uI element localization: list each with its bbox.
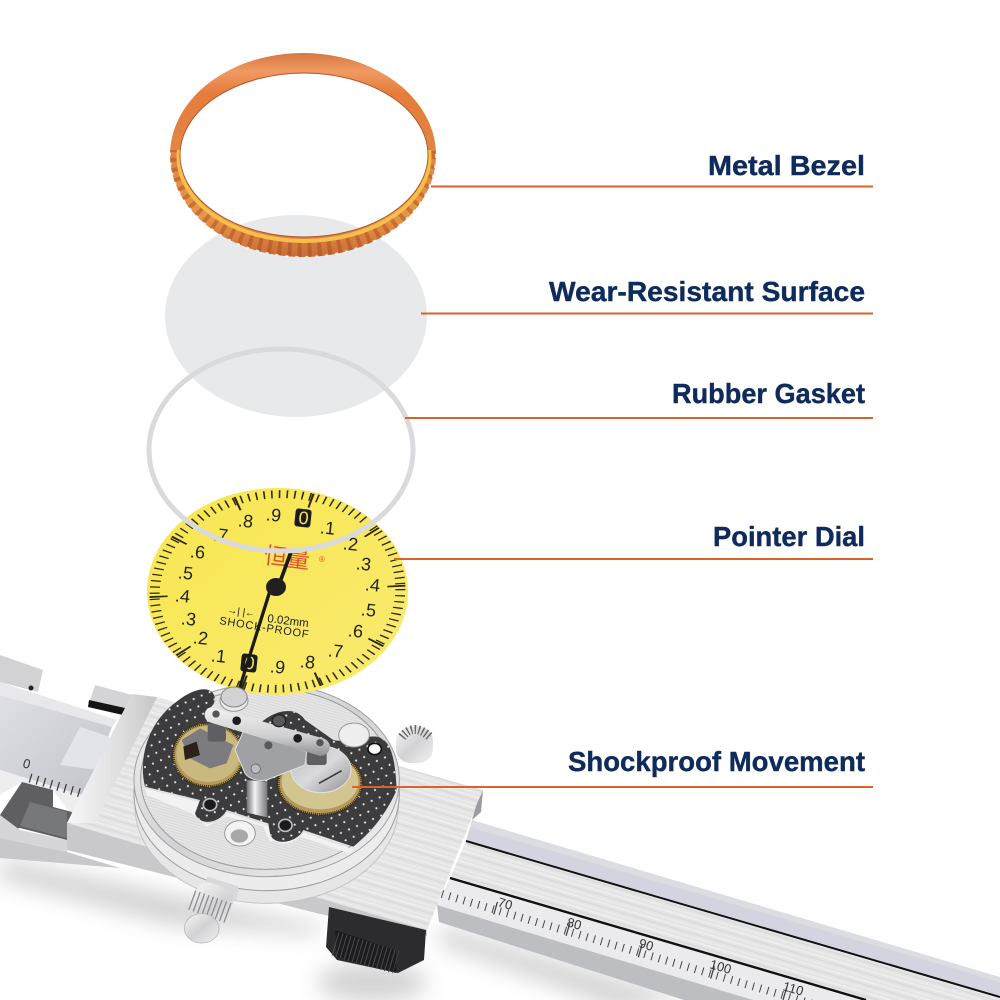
lower black groove [450,878,866,1000]
beam scale strip [437,878,866,1000]
major scale ticks [495,908,870,1000]
rib lines [335,944,396,962]
silver well upper left [220,690,248,711]
dial numbers: .9 [269,656,286,678]
center post [247,780,267,817]
housing top rim [134,683,399,877]
bezel outer scallops [170,152,436,258]
hole center [279,819,292,831]
rear block [88,685,132,715]
dial housing [134,683,399,903]
right brass gear [278,746,362,815]
shadow under slider [0,858,320,935]
movement plate [143,689,397,853]
registered mark: ® [319,555,325,564]
minor scale ticks [442,894,870,1000]
leader line [352,786,873,788]
plate screw [251,764,260,773]
top zero: 0 [298,508,310,529]
dial numbers: .8 [299,651,316,673]
plate screw upper [264,741,272,749]
label text: Rubber Gasket [672,378,865,409]
silver well lower [225,821,255,846]
left brass gear [173,723,244,787]
housing floor [141,688,393,869]
bezel knurling [170,150,436,257]
cut-out recess [0,782,72,840]
needle [237,549,293,692]
dial minor ticks [148,486,407,697]
dial numbers: .1 [319,517,336,539]
beam lavender face [466,827,1000,997]
spring dark part [183,742,200,760]
black thumb button [326,907,426,973]
rear block dark slot [88,700,125,715]
knob end cap [184,914,219,943]
housing outer side [135,710,398,903]
dial numbers: .4 [174,585,191,607]
left lavender face [0,695,112,797]
dial numbers: .4 [364,574,381,596]
scale numbers [496,894,805,999]
cover slot screw [319,771,342,783]
gear face [282,755,358,809]
resolution arrows: →| |← [227,605,256,620]
post head [221,687,247,707]
label text: Shockproof Movement [568,746,865,777]
top zero box [294,508,312,528]
hole left [203,799,217,811]
left scale strip [0,770,85,815]
pinion [307,748,327,765]
hole upper [272,715,286,727]
bottom zero: 0 [244,653,256,674]
shadow under button [317,962,427,1000]
leader line [421,312,873,314]
shadow under beam [440,925,690,1000]
button ribs [335,930,396,973]
dial numbers: .6 [347,620,364,642]
rubber gasket ring [149,349,413,551]
dial face [147,488,408,695]
recess floor [20,802,67,838]
dial numbers: .1 [210,645,227,667]
bar body [205,708,330,756]
beam side face [437,905,753,1000]
brand logo: 恒量 [263,542,311,574]
leader line [431,186,873,188]
well screw lower [231,829,248,843]
housing seam [134,697,399,891]
dial numbers: .7 [327,640,344,662]
scale numbers: 110 [781,978,805,999]
knob knurl [192,900,231,914]
gear cover disc [291,746,351,793]
bottom knurled knob [182,877,239,943]
lower left bar [0,815,67,852]
plate perforated dots [143,689,397,847]
beam brushed center [450,841,1000,1000]
left beam section [0,655,132,868]
gear teeth [278,752,362,815]
window [60,727,110,770]
bar screw 2 [232,716,241,725]
jaw screw [28,686,34,690]
center triangular plate [235,730,307,780]
bezel knurling wrapper [170,150,436,258]
slider side [67,823,427,936]
dial numbers: .3 [180,608,197,630]
dial numbers: .3 [355,553,372,575]
dial numbers: .2 [192,627,209,649]
knob body [396,727,433,763]
gear teeth [173,723,244,787]
scale numbers: 70 [496,894,514,913]
plate shadow lip [145,788,353,853]
jaw block [0,655,43,692]
gear hub cover [182,728,233,768]
left scale ticks [30,778,84,794]
lower left fade [0,838,120,868]
beam top strip [470,820,1000,985]
left scale zero: 0 [21,755,32,772]
knob stem [203,877,239,900]
dial numbers: .9 [265,504,282,526]
metal bezel ring [170,53,436,257]
slider front bar [67,694,157,823]
bezel body [170,53,436,257]
slider body [67,694,483,936]
resolution text: 0.02mm [267,613,309,630]
label text: Metal Bezel [708,150,865,181]
dial numbers: .5 [360,599,377,621]
scale numbers: 100 [708,956,733,977]
bar screw 1 [212,710,220,718]
upper black groove [466,841,1000,997]
bottom zero box [240,653,258,673]
leader line [394,558,873,560]
bar screw 3 [293,734,302,743]
plate dark [143,689,397,847]
pinion [208,723,226,742]
needle hub [266,578,286,596]
slider right edge [472,790,483,820]
dial numbers: .5 [177,562,194,584]
left top strip [0,682,117,727]
caliper beam [437,820,1000,1000]
bezel inner edge [180,73,428,237]
knob knurl [402,730,430,737]
dial numbers: .7 [212,524,229,546]
dial numbers: .8 [237,510,254,532]
dial numbers: .2 [342,533,359,555]
label text: Wear-Resistant Surface [549,276,865,307]
top bridge bar [205,708,330,756]
ground shadows [0,858,690,1000]
gear face [176,726,240,782]
knob cylinder [182,879,237,942]
scale numbers: 80 [565,914,583,933]
shock-proof text: SHOCK-PROOF [219,615,310,641]
label text: Pointer Dial [713,521,865,552]
dial major ticks [154,491,401,692]
wear-resistant surface disc [165,215,427,417]
dial numbers: .6 [189,541,206,563]
silver well upper right [339,723,369,747]
post screw in front of dial [221,687,247,707]
scale numbers: 90 [637,935,655,954]
bezel inner gold chamfer [176,150,432,243]
slider top brushed [67,697,483,930]
bar screw 4 [316,739,324,746]
leader line [405,417,873,419]
hole right [368,743,381,755]
pointer dial [147,486,408,697]
right knurled knob [396,727,433,763]
button body [326,907,426,973]
dial numbers [174,504,381,678]
